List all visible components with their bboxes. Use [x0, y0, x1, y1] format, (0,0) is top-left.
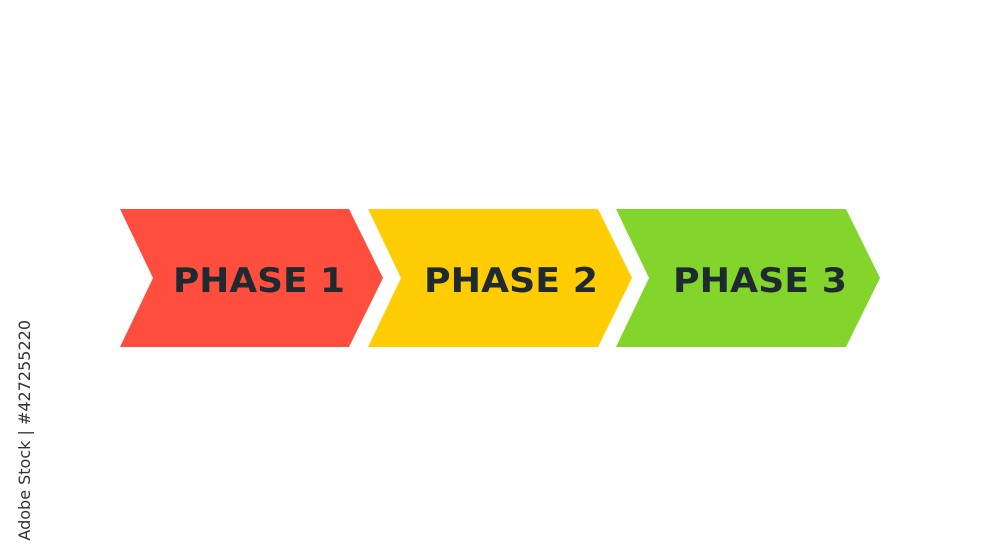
arrow: phase 2: PHASE 2: [424, 261, 598, 301]
side id text: Adobe Stock | #427255220: [15, 320, 34, 541]
arrow: phase 2: [368, 209, 632, 347]
arrow: phase 1: [120, 209, 383, 347]
arrow: phase 3: [616, 209, 880, 347]
arrow: phase 1: PHASE 1: [173, 261, 345, 301]
arrow: phase 3: PHASE 3: [673, 261, 847, 301]
